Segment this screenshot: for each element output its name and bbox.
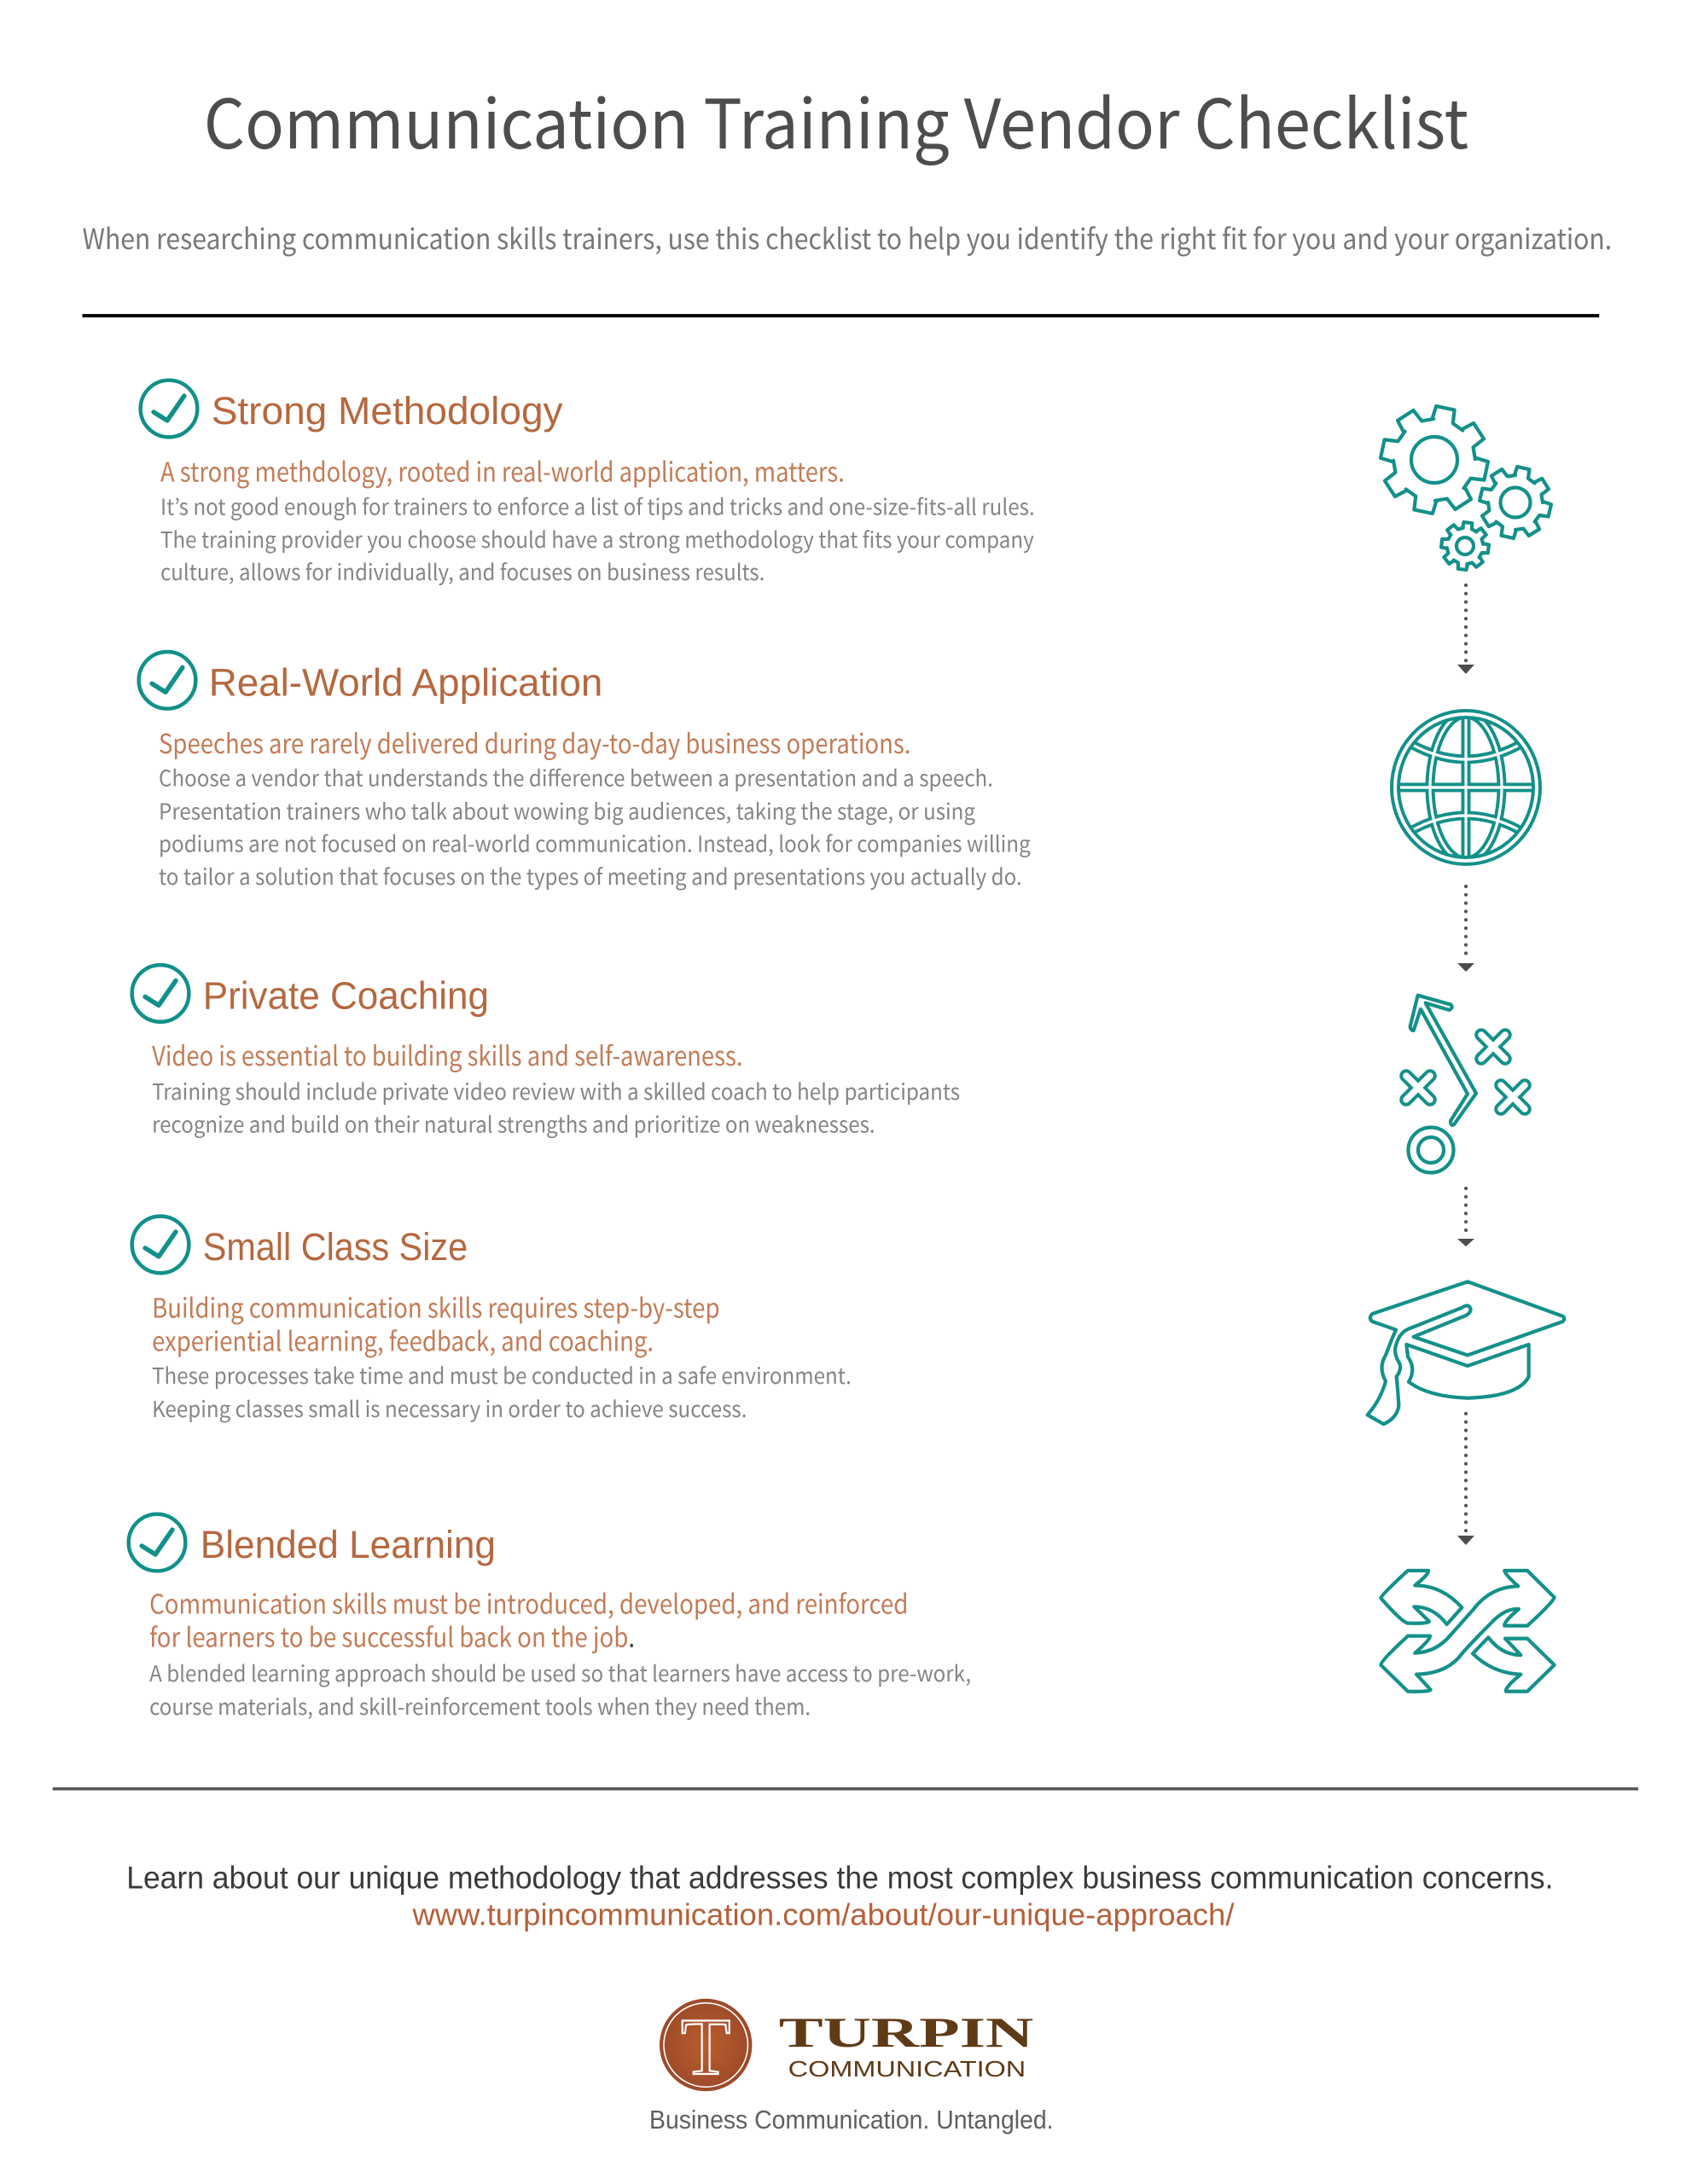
subheading 2: Speeches are rarely delivered during day-to-day business operations. xyxy=(159,723,910,762)
panel: private coaching xyxy=(132,965,960,1140)
arrow: globe to playbook xyxy=(1457,886,1474,972)
body 2: Choose a vendor that understands the difference between a presentation and a speech. xyxy=(159,762,993,793)
icon: check 1 xyxy=(141,380,197,437)
logo badge xyxy=(660,1999,752,2092)
subheading 4 xyxy=(152,1287,720,1359)
icon: check 4 xyxy=(132,1217,189,1273)
subheading 4: experiential learning, feedback, and coaching. xyxy=(152,1321,654,1359)
heading 1: Strong Methodology xyxy=(212,389,563,433)
footer call to action: Learn about our unique methodology that addresses the most complex business communication concerns. xyxy=(126,1860,1554,1895)
panel: blended learning xyxy=(129,1514,971,1722)
heading 3: Private Coaching xyxy=(203,973,489,1017)
icon: coaching playbook xyxy=(1406,996,1525,1172)
body 2 xyxy=(159,762,1031,892)
body 5 xyxy=(149,1657,971,1722)
body 1 xyxy=(160,490,1035,587)
icon: crossing arrows xyxy=(1381,1571,1555,1692)
body 2: to tailor a solution that focuses on the types of meeting and presentations you actually do. xyxy=(159,860,1022,892)
body 1: The training provider you choose should have a strong methodology that fits your company xyxy=(160,523,1034,555)
tagline: Business Communication. Untangled. xyxy=(649,2105,1054,2135)
title: Communication Training Vendor Checklist xyxy=(204,70,1468,168)
icon: graduation cap xyxy=(1368,1281,1564,1424)
body 4: These processes take time and must be conducted in a safe environment. xyxy=(152,1359,852,1391)
arrow: cap to blended arrows xyxy=(1457,1414,1474,1545)
body 3: recognize and build on their natural strengths and prioritize on weaknesses. xyxy=(152,1108,875,1140)
body 3 xyxy=(152,1075,960,1140)
body 2: podiums are not focused on real-world communication. Instead, look for companies willing xyxy=(159,827,1031,858)
body 5: A blended learning approach should be used so that learners have access to pre-work, xyxy=(149,1657,971,1688)
arrow: gears to globe xyxy=(1457,585,1474,674)
body 2: Presentation trainers who talk about wowing big audiences, taking the stage, or using xyxy=(159,795,975,827)
panel: strong methodology xyxy=(141,380,1035,587)
body 4: Keeping classes small is necessary in order to achieve success. xyxy=(152,1392,747,1424)
icon: check 3 xyxy=(132,965,189,1022)
body 1: culture, allows for individually, and focuses on business results. xyxy=(160,555,765,587)
panel: real-world application xyxy=(139,652,1031,892)
subheading 3: Video is essential to building skills and self-awareness. xyxy=(152,1036,742,1074)
icon: gears xyxy=(1378,404,1553,571)
body 4 xyxy=(152,1359,852,1424)
subheading 5: Communication skills must be introduced, developed, and reinforced xyxy=(149,1584,908,1623)
logo wordmark xyxy=(779,2009,1033,2082)
heading 4: Small Class Size xyxy=(203,1225,468,1269)
body 3: Training should include private video review with a skilled coach to help participants xyxy=(152,1075,960,1107)
panel: small class size xyxy=(132,1217,852,1424)
footer call to action xyxy=(126,1860,1554,1931)
subheading 4: Building communication skills requires step-by-step xyxy=(152,1287,720,1326)
icon: globe xyxy=(1391,708,1541,867)
icon: check 2 xyxy=(139,652,195,709)
arrow: playbook to cap xyxy=(1457,1188,1474,1246)
body 5: course materials, and skill-reinforcement tools when they need them. xyxy=(149,1690,811,1722)
logo wordmark: COMMUNICATION xyxy=(788,2058,1026,2082)
icon: check 5 xyxy=(129,1514,185,1571)
footer call to action: www.turpincommunication.com/about/our-unique-approach/ xyxy=(411,1897,1235,1931)
subheading 5: for learners to be successful back on the job. xyxy=(149,1617,635,1655)
heading 5: Blended Learning xyxy=(201,1523,496,1566)
logo badge: T xyxy=(681,2001,730,2092)
subheading 1: A strong methdology, rooted in real-world application, matters. xyxy=(160,452,845,491)
heading 2: Real-World Application xyxy=(209,660,602,704)
subheading 5 xyxy=(149,1584,908,1655)
logo wordmark: TURPIN xyxy=(779,2009,1033,2056)
body 1: It’s not good enough for trainers to enforce a list of tips and tricks and one-size-fits-all rules. xyxy=(160,490,1035,521)
logo: Turpin Communication xyxy=(660,1999,1033,2092)
